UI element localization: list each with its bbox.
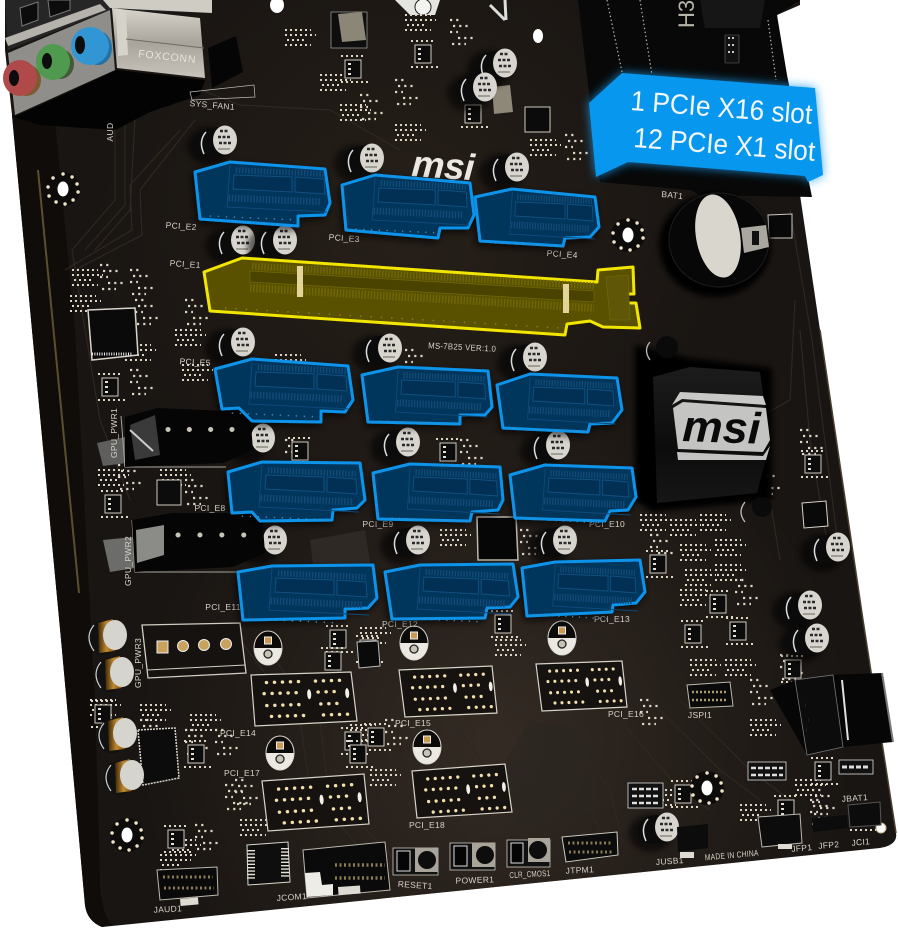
silkscreen labels: PCI_E14 [220,728,256,738]
PCIe X16 slot [204,258,640,335]
silkscreen labels: AUD [105,123,115,141]
JUSB1 header [655,824,708,867]
GPU power connector 1 [97,408,253,467]
silkscreen labels: PCI_E11 [205,602,241,612]
reset button [393,848,438,891]
fan header [189,36,255,112]
capacitors [87,48,850,852]
clear CMOS button: CLR_CMOS1 [509,868,551,880]
GPU power connector 3 footprint: GPU_PWR3 [133,638,143,688]
GPU power connector 1: GPU_PWR1 [109,408,119,458]
slot PCI_E8 [228,462,365,521]
PCIe X1 pin footprints [251,661,627,831]
bottom headers and buttons [153,682,881,915]
blue audio jack [71,27,112,65]
slot marking H3: H3 [674,0,699,28]
silkscreen labels: PCI_E10 [589,519,625,529]
callout: slot count [589,73,823,182]
inductors [270,0,550,132]
slot PCI_E4 [475,189,599,246]
callout line 2: 12 PCIe X1 slot [633,122,817,167]
GPU power connector 2 [103,513,265,586]
made in China text: MADE IN CHINA [704,848,759,862]
silkscreen labels: PCI_E12 [382,619,418,629]
slot PCI_E11 [238,565,377,620]
slot PCI_E5 [215,359,353,422]
silkscreen labels: PCI_E16 [608,709,644,719]
slot PCI_E3 [342,175,474,238]
JSPI1 header: JSPI1 [688,710,712,720]
callout line 1: 1 PCIe X16 slot [630,85,814,130]
slot PCI_E2 [195,162,330,226]
top PCIe/memory slots [578,0,812,197]
fan header: SYS_FAN1 [189,98,235,112]
JAUD1 header [153,867,218,915]
JCOM header: JCOM1 [276,891,307,903]
JBAT1 and JCI1: JBAT1 [841,792,868,804]
slot PCI_E9 [373,464,503,521]
GPU power connector 3 footprint [133,623,246,688]
JCOM header [276,842,390,903]
clear CMOS button [507,838,551,880]
rear I/O shield [3,0,212,130]
JFP2 header [812,815,848,851]
reset button: RESET1 [397,879,433,891]
silkscreen labels: PCI_E5 [179,356,211,368]
JFP2 header: JFP2 [818,839,840,851]
mounting holes [46,172,886,852]
slot PCI_E7 [497,374,622,432]
silkscreen labels: PCI_E8 [194,503,226,513]
battery holder [659,189,771,297]
JFP1 header: JFP1 [791,842,813,854]
silkscreen labels: PCI_E15 [395,718,431,728]
SATA connectors [770,673,893,755]
solder footprint markers [254,621,576,770]
small capacitors beside heat sink [646,336,772,522]
power button: POWER1 [455,874,494,886]
silkscreen labels: PCI_E2 [165,220,197,232]
heat sink with MSI badge [635,336,772,522]
silkscreen labels: PCI_E17 [224,768,260,778]
JSPI1 header [687,682,733,720]
JTPM1 header: JTPM1 [565,864,594,876]
JUSB1 header: JUSB1 [655,855,684,867]
Foxconn label: FOXCONN [138,48,197,66]
JAUD1 header: JAUD1 [153,903,182,915]
JFP1 header [758,814,813,854]
slot PCI_E12 [385,564,518,619]
silkscreen labels: PCI_E4 [546,248,578,260]
battery holder: BAT1 [661,189,684,201]
silkscreen labels: PCI_E18 [409,820,445,830]
PCIe latch left [297,266,303,297]
green audio jack [36,44,74,80]
slot PCI_E10 [510,465,636,521]
power button [450,843,495,886]
GPU power connector 2: GPU_PWR2 [123,536,133,586]
MSI logo on board: msi [410,143,477,188]
PCIe X1 slots [195,162,645,620]
silkscreen labels: PCI_E1 [169,258,201,270]
red audio jack [3,60,41,96]
slot PCI_E6 [362,367,492,424]
PCIe latch right [563,284,569,313]
QFP chips [88,214,828,885]
silkscreen labels: PCI_E13 [594,614,630,624]
JBAT1 and JCI1: JCI1 [851,836,870,848]
JBAT1 and JCI1 [841,792,881,848]
X1 slot contact details [210,165,638,623]
JTPM1 header [562,832,618,876]
silkscreen labels: PCI_E9 [362,519,394,529]
silkscreen labels [105,123,644,830]
silkscreen labels: PCI_E3 [328,232,360,244]
slot PCI_E13 [522,560,645,616]
silkscreen labels: MS-7B25 VER:1.0 [428,340,496,354]
badge text: msi [682,402,762,454]
